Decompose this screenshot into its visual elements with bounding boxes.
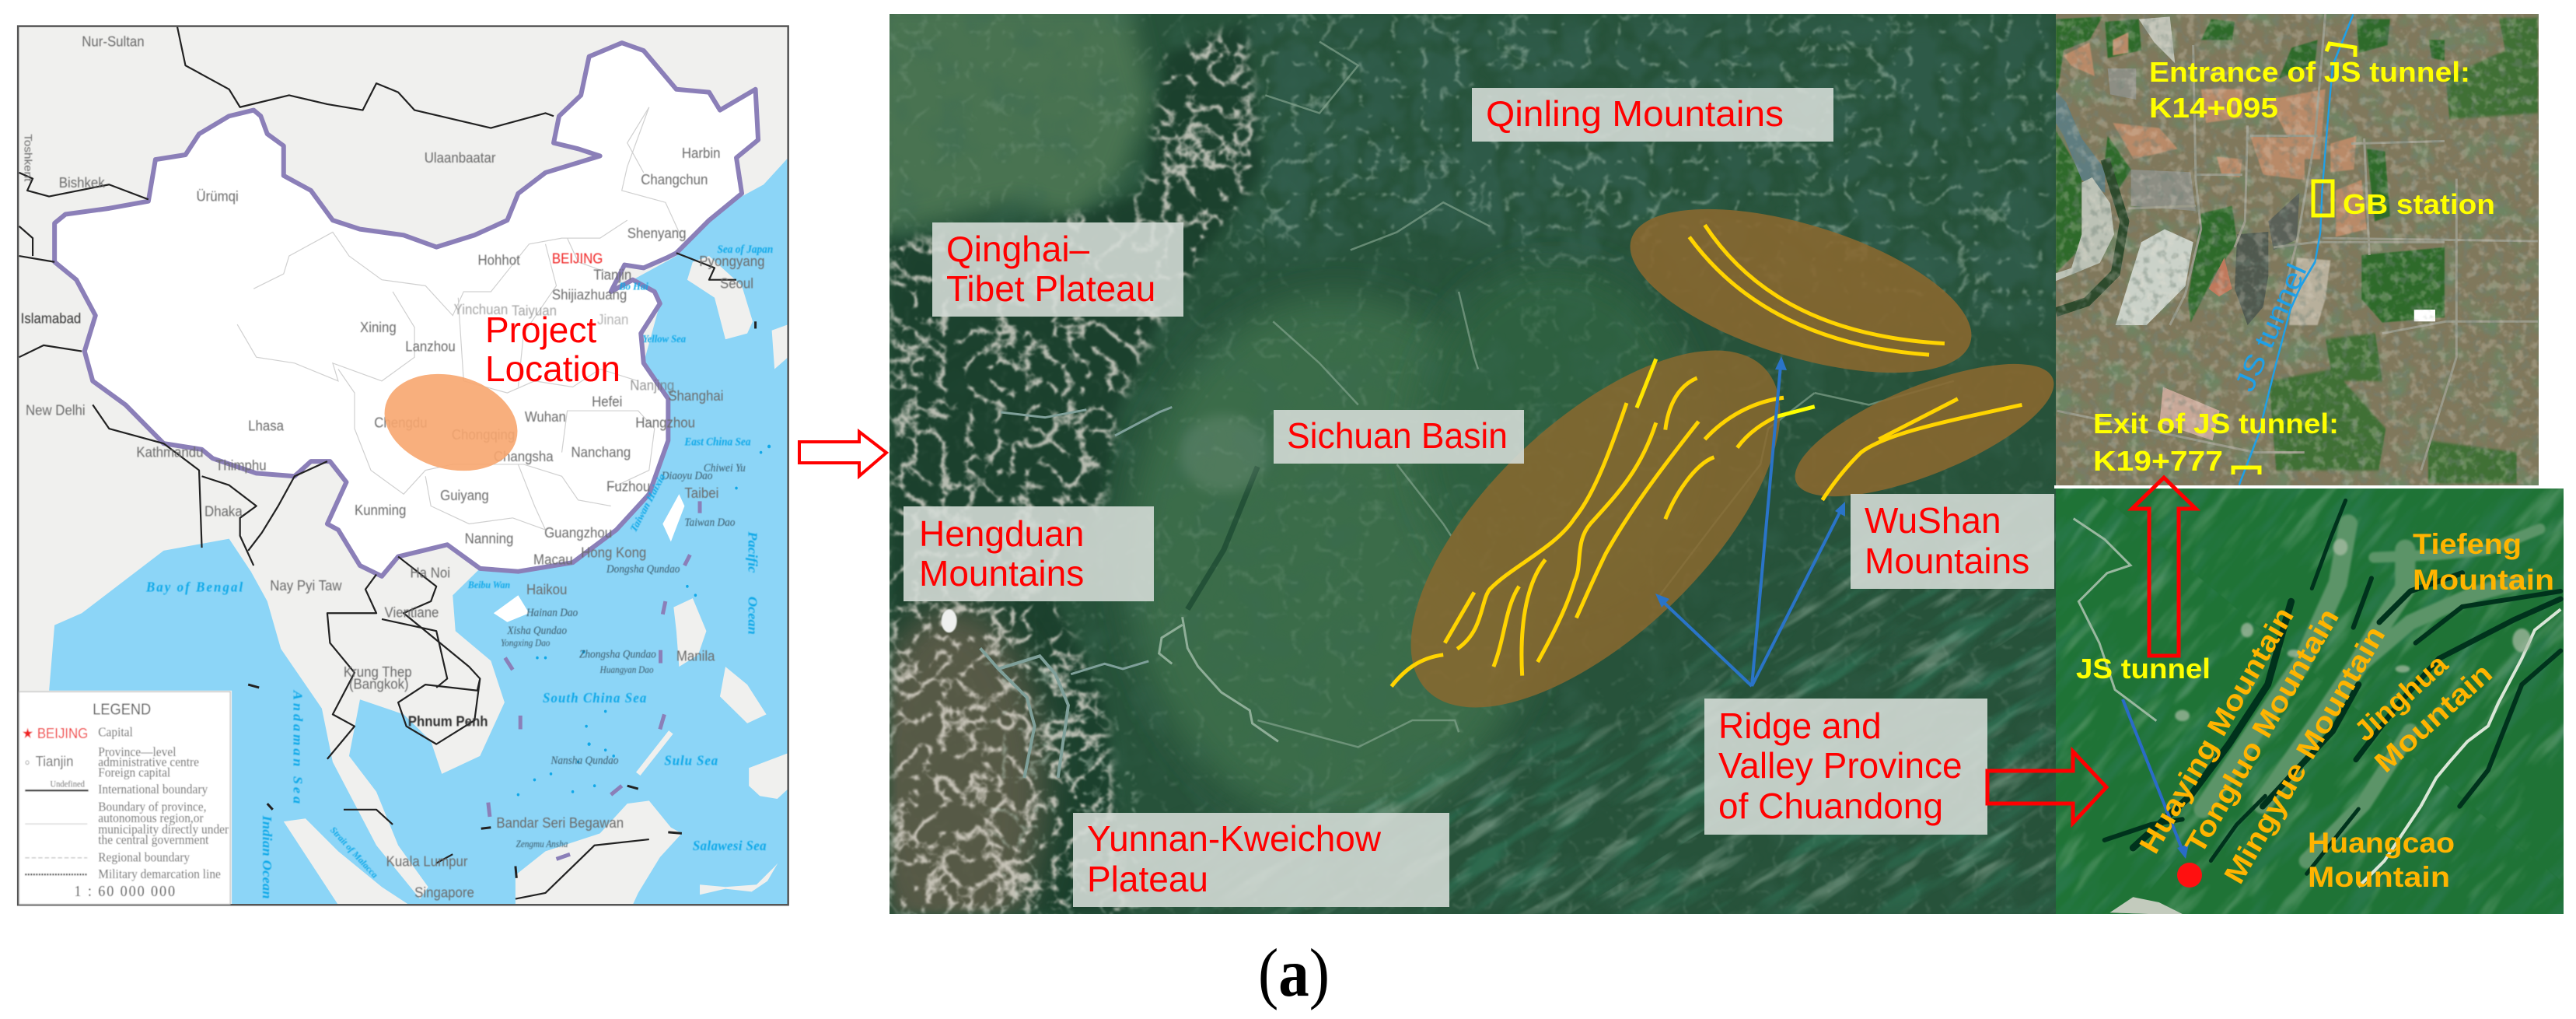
map place name labels: South China Sea xyxy=(543,689,646,706)
label: Jinghua: Jinghua xyxy=(2348,647,2454,748)
map place name labels: Xisha Qundao xyxy=(506,625,567,637)
legend: municipality directly under xyxy=(98,823,229,837)
label: Mingyue Mountain: Mingyue Mountain xyxy=(2218,621,2391,889)
label: Qinghai-Tibet Plateau: Qinghai– xyxy=(946,229,1090,269)
map place name labels: Islamabad xyxy=(21,310,81,327)
label: Mountain under Jinghua: Mountain xyxy=(2368,657,2498,779)
label: Ridge and Valley Province of Chuandong xyxy=(1704,699,1987,835)
legend: 1 : 60 000 000 xyxy=(74,883,175,900)
map place name labels: Dongsha Qundao xyxy=(606,564,680,576)
legend: Capital xyxy=(98,726,133,740)
project location label: Location xyxy=(485,348,620,389)
map place name labels: Taiwan Haixia xyxy=(627,471,667,534)
label: Hengduan Mountains xyxy=(904,506,1154,601)
map place name labels: Hangzhou xyxy=(635,415,695,431)
label: Tiefeng Mountain: Tiefeng xyxy=(2413,528,2522,560)
map place name labels: Wuhan xyxy=(525,408,566,425)
map place name labels: Shijiazhuang xyxy=(552,286,627,303)
map place name labels: Phnum Penh xyxy=(408,713,488,730)
map place name labels: Vientiane xyxy=(385,604,439,621)
map place name labels: Andaman Sea xyxy=(291,690,306,804)
label: WuShan Mountains: Mountains xyxy=(1865,541,2029,581)
map place name labels: Nur-Sultan xyxy=(82,33,145,50)
map place name labels: Changsha xyxy=(494,448,554,464)
label: Tiefeng Mountain: Mountain xyxy=(2413,564,2554,596)
map place name labels: Xining xyxy=(360,319,397,335)
label: exit of JS tunnel: K19+777 xyxy=(2093,445,2223,477)
legend: Boundary of province, xyxy=(98,800,206,814)
legend: Province—level xyxy=(98,745,177,759)
map place name labels: Hohhot xyxy=(478,252,520,268)
map place name labels: New Delhi xyxy=(26,402,86,418)
map place name labels: Dhaka xyxy=(204,503,243,520)
label: Hengduan Mountains: Hengduan xyxy=(919,513,1084,554)
map place name labels: Taibei xyxy=(684,485,718,501)
satellite terrain xyxy=(890,14,2056,914)
label: Huaying Mountain: Huaying Mountain xyxy=(2133,601,2300,859)
map place name labels: Lhasa xyxy=(248,418,284,433)
map place name labels: Hefei xyxy=(592,394,622,410)
label: Sichuan Basin: Sichuan Basin xyxy=(1287,415,1508,456)
map place name labels: Zengmu Ansha xyxy=(516,839,568,849)
label: Huangcao Mountain: Huangcao xyxy=(2308,827,2455,859)
map place name labels: Nanjing xyxy=(630,377,674,393)
map place name labels: Kathmandu xyxy=(136,444,203,460)
map place name labels: Bishkek xyxy=(59,174,105,191)
arrow: detail image to tunnel image xyxy=(2132,478,2196,656)
label: Yunnan-Kweichow Plateau xyxy=(1073,813,1449,907)
map place name labels: Hainan Dao xyxy=(526,608,578,619)
urban satellite ground xyxy=(2056,14,2539,485)
legend: Regional boundary xyxy=(98,851,190,865)
legend: Undefined xyxy=(51,779,85,790)
map place name labels: (Bangkok) xyxy=(349,676,409,692)
label: Yunnan-Kweichow Plateau: Yunnan-Kweichow xyxy=(1087,818,1382,859)
blue pointer arrows xyxy=(1655,356,1845,686)
map place name labels: Shanghai xyxy=(668,387,723,404)
marker: exit bracket xyxy=(2233,467,2260,474)
map place name labels: Guiyang xyxy=(440,487,489,503)
label: Hengduan Mountains: Mountains xyxy=(919,553,1084,594)
label: WuShan Mountains xyxy=(1851,494,2054,589)
map place name labels: Ürümqi xyxy=(197,188,239,205)
label: WuShan Mountains: WuShan xyxy=(1865,500,2001,541)
map place name labels: Chongqing xyxy=(452,426,515,443)
legend: the central government xyxy=(98,834,209,847)
tunnel alignment line xyxy=(2239,14,2354,485)
marker: entrance bracket xyxy=(2326,44,2355,57)
label: Qinghai-Tibet Plateau xyxy=(932,222,1183,317)
marker: GB station xyxy=(2313,181,2333,215)
map place name labels: BEIJING xyxy=(552,250,603,266)
map place name labels: Krung Thep xyxy=(344,664,412,680)
label: Ridge and Valley Province of Chuandong: Valley Province xyxy=(1718,745,1963,786)
label: Qinling Mountains xyxy=(1472,88,1833,142)
map place name labels: Taiwan Dao xyxy=(684,517,735,529)
rivers xyxy=(1257,42,1954,747)
ridge zone: north ellipse xyxy=(1630,208,1972,373)
map place name labels: Seoul xyxy=(720,275,753,292)
map place name labels: Indian Ocean xyxy=(260,814,274,899)
panel: regional satellite image xyxy=(890,14,2056,914)
map place name labels: Diaoyu Dao xyxy=(661,471,712,482)
panel: China location map xyxy=(18,26,788,905)
map place name labels: East China Sea xyxy=(683,436,751,449)
label: Yunnan-Kweichow Plateau: Plateau xyxy=(1087,859,1208,899)
map place name labels: Macau xyxy=(533,552,573,568)
map place name labels: Chiwei Yu xyxy=(704,463,746,474)
map place name labels: Yongxing Dao xyxy=(501,638,551,648)
legend: International boundary xyxy=(98,783,208,797)
image frame divider xyxy=(2054,485,2539,488)
label: JS tunnel rotated: JS tunnel xyxy=(2228,259,2312,396)
map place name labels: Pacific xyxy=(746,531,760,573)
map place name labels: Shenyang xyxy=(627,225,687,241)
label: entrance of JS tunnel: Entrance of JS tunnel: xyxy=(2149,56,2470,88)
map place name labels: Changchun xyxy=(641,172,708,187)
map place name labels: Thimphu xyxy=(215,457,267,474)
legend: Foreign capital xyxy=(98,766,171,780)
map place name labels: Huangyan Dao xyxy=(599,664,654,675)
map place name labels: Ha Noi xyxy=(411,565,450,581)
ridge zone: central ellipse xyxy=(1410,350,1781,708)
legend: LEGEND xyxy=(93,702,151,719)
label: Tongluo Mountain: Tongluo Mountain xyxy=(2179,603,2345,859)
map place name labels: Fuzhou xyxy=(606,478,650,495)
label: Qinling Mountains: Qinling Mountains xyxy=(1486,93,1784,134)
label: Sichuan Basin xyxy=(1274,410,1524,464)
map base geography xyxy=(18,26,788,905)
map place name labels: Kunming xyxy=(355,502,406,518)
label: Qinghai-Tibet Plateau: Tibet Plateau xyxy=(946,268,1155,309)
ridge satellite ground xyxy=(2056,488,2564,916)
legend: Tianjin xyxy=(36,753,74,769)
map place name labels: Sea of Japan xyxy=(717,244,773,256)
label: Huangcao Mountain: Mountain xyxy=(2308,861,2450,893)
map place name labels: Nansha Qundao xyxy=(551,755,618,767)
arrow: ridge province to detail image xyxy=(1987,751,2106,823)
map place name labels: Tianjin xyxy=(593,267,631,283)
map place name labels: Beibu Wan xyxy=(467,580,510,590)
map place name labels: Nanchang xyxy=(571,444,631,460)
map place name labels: Lanzhou xyxy=(405,338,456,355)
label: Ridge and Valley Province of Chuandong: of Chuandong xyxy=(1718,786,1943,826)
label: entrance of JS tunnel: K14+095 xyxy=(2149,92,2278,124)
ridge zone: WuShan ellipse xyxy=(1795,364,2054,496)
map place name labels: Bay of Bengal xyxy=(145,579,243,595)
legend: ★ BEIJING xyxy=(22,725,88,741)
map place name labels: Haikou xyxy=(526,581,567,597)
map place name labels: Strait of Malacca xyxy=(328,825,379,881)
map place name labels: Ulaanbaatar xyxy=(425,149,496,166)
label: Ridge and Valley Province of Chuandong: Ridge and xyxy=(1718,706,1882,746)
panel: JS tunnel alignment image xyxy=(2056,14,2539,485)
map place name labels: Singapore xyxy=(414,884,474,900)
map place name labels: Hong Kong xyxy=(581,545,646,560)
legend: autonomous region,or xyxy=(98,811,204,825)
map place name labels: Sulu Sea xyxy=(664,752,718,769)
map place name labels: Jinan xyxy=(597,311,628,327)
map place name labels: Ocean xyxy=(746,597,760,635)
map place name labels: Yellow Sea xyxy=(642,333,686,345)
map place name labels: Pyongyang xyxy=(699,253,765,269)
label: exit of JS tunnel: Exit of JS tunnel: xyxy=(2093,408,2339,439)
fold axis lines xyxy=(1392,225,2022,686)
map place name labels: Salawesi Sea xyxy=(693,837,767,853)
arrow: map to satellite view xyxy=(799,432,886,476)
map place name labels: Nanning xyxy=(465,531,513,547)
map place name labels: Yinchuan xyxy=(454,301,508,317)
map place name labels: Bandar Seri Begawan xyxy=(496,814,624,831)
legend: Military demarcation line xyxy=(98,867,221,881)
legend: administrative centre xyxy=(98,755,199,769)
map place name labels: Kuala Lumpur xyxy=(386,853,468,870)
pointer: JS tunnel location xyxy=(2123,699,2189,859)
map place name labels: Manila xyxy=(676,648,715,664)
map place name labels xyxy=(21,33,773,900)
map place name labels: Harbin xyxy=(682,145,720,161)
panel: Chuandong ridge detail image xyxy=(2056,488,2564,916)
label: JS tunnel: JS tunnel xyxy=(2076,653,2211,685)
project location highlight xyxy=(373,360,529,485)
map place name labels: Toshkent xyxy=(22,134,33,181)
project location label: Project xyxy=(485,310,596,350)
map place name labels: Chengdu xyxy=(374,415,428,431)
marker: JS tunnel point xyxy=(2177,863,2202,888)
map place name labels: Taiyuan xyxy=(512,303,557,319)
legend xyxy=(19,692,230,904)
label: GB station: GB station xyxy=(2343,188,2495,220)
caption: (a): (a) xyxy=(1258,936,1330,1011)
map place name labels: Nay Pyi Taw xyxy=(270,577,342,594)
map place name labels: Zhongsha Qundao xyxy=(579,649,656,661)
map place name labels: Bo Hai xyxy=(618,280,648,292)
map place name labels: Guangzhou xyxy=(544,524,612,541)
